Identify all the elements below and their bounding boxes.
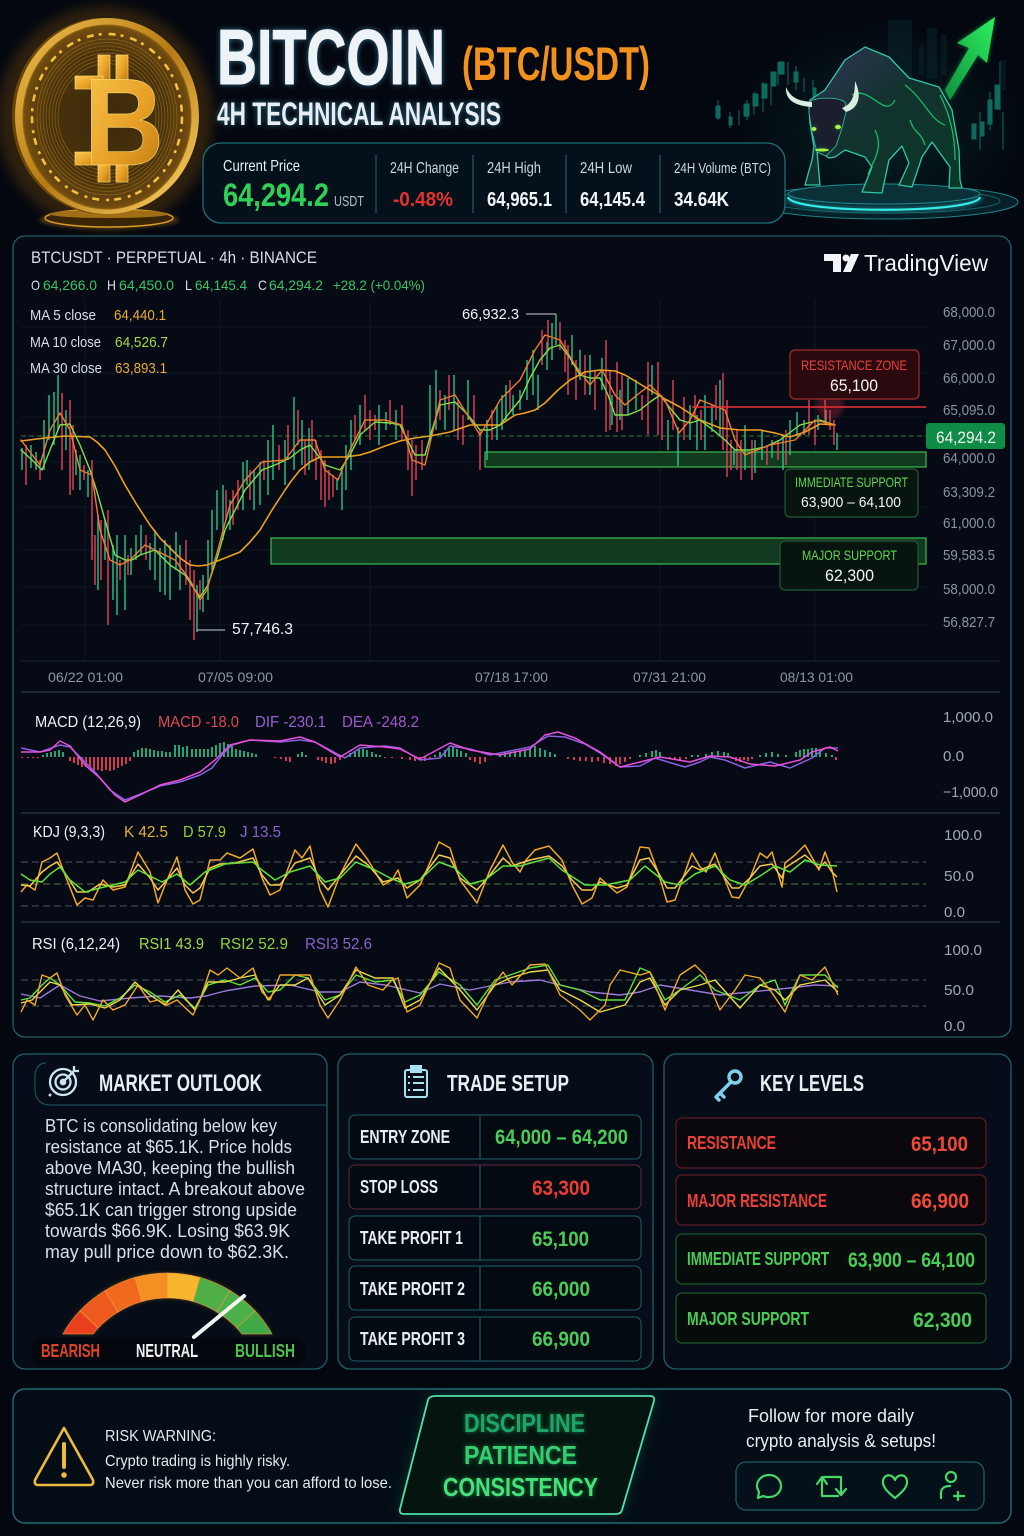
price axis: 61,000.0 (943, 515, 995, 532)
panel: chart (13, 236, 1011, 1037)
row: stop loss (349, 1165, 641, 1209)
price axis: 66,000.0 (943, 370, 995, 387)
24h volume (674, 160, 771, 211)
24h low: 24H Low (580, 160, 632, 177)
outlook heading: MARKET OUTLOOK (99, 1070, 262, 1097)
price axis (943, 304, 995, 631)
row: take profit 2: 66,000 (532, 1278, 590, 1301)
risk warning text: Crypto trading is highly risky. (105, 1453, 290, 1470)
follow text: crypto analysis & setups! (746, 1431, 936, 1451)
moving average legend: MA 10 close (30, 334, 101, 351)
level: immediate support: 63,900 – 64,100 (848, 1249, 975, 1272)
motto card (400, 1396, 654, 1514)
motto card: CONSISTENCY (443, 1472, 598, 1502)
MACD axis: −1,000.0 (943, 784, 998, 801)
time axis: 07/18 17:00 (475, 669, 548, 685)
chart header: 64,294.2 (269, 277, 323, 293)
price axis: 67,000.0 (943, 337, 995, 354)
MACD legend: MACD -18.0 (158, 714, 239, 731)
row: take profit 3: TAKE PROFIT 3 (360, 1329, 465, 1349)
level: major support: 62,300 (913, 1309, 972, 1332)
KDJ legend: KDJ (9,3,3) (33, 824, 105, 841)
row: take profit 2: TAKE PROFIT 2 (360, 1279, 465, 1299)
RSI axis: 0.0 (944, 1018, 965, 1035)
current price: USDT (334, 193, 364, 210)
chart header: L (185, 277, 192, 293)
level: resistance (676, 1118, 986, 1168)
KDJ axis: 0.0 (944, 904, 965, 921)
level: major support: MAJOR SUPPORT (687, 1309, 809, 1329)
title: BITCOIN (217, 13, 445, 101)
MA 30 line (21, 370, 835, 566)
KDJ legend (33, 824, 281, 841)
outlook body text (45, 1116, 305, 1262)
follow text (746, 1406, 936, 1451)
bull body (805, 47, 962, 193)
risk warning text (105, 1428, 392, 1492)
time axis: 07/31 21:00 (633, 669, 706, 685)
callout: major support: 62,300 (825, 566, 874, 585)
moving average legend: 63,893.1 (115, 360, 167, 377)
24h volume: 34.64K (674, 189, 729, 211)
RSI legend: RSI (6,12,24) (32, 936, 120, 953)
MACD axis (943, 709, 998, 801)
row: take profit 1: 65,100 (532, 1228, 589, 1251)
MACD axis: 0.0 (943, 748, 964, 765)
social icons (736, 1462, 984, 1510)
platform (752, 184, 1018, 219)
row: stop loss: STOP LOSS (360, 1177, 438, 1197)
row: take profit 1: TAKE PROFIT 1 (360, 1228, 463, 1248)
KDJ axis (944, 827, 982, 921)
MA 5 line (21, 335, 835, 600)
callout: resistance zone: RESISTANCE ZONE (801, 357, 907, 373)
risk warning text: RISK WARNING: (105, 1428, 216, 1445)
peak and trough labels (197, 306, 556, 638)
panel: footer (13, 1389, 1011, 1523)
follow text: Follow for more daily (748, 1406, 914, 1426)
outlook body text: may pull price down to $62.3K. (45, 1242, 289, 1262)
panel: key levels (664, 1054, 1011, 1369)
price axis: 63,309.2 (943, 484, 995, 501)
icon: warning triangle (35, 1428, 93, 1485)
RSI lines (21, 963, 838, 1020)
level: major resistance (676, 1175, 986, 1225)
title (217, 13, 650, 132)
24h change: -0.48% (393, 189, 453, 211)
motto card: DISCIPLINE (464, 1408, 585, 1438)
24h high: 24H High (487, 160, 541, 177)
price axis: 56,827.7 (943, 614, 995, 631)
green arrow (945, 17, 995, 100)
callout: major support (780, 541, 918, 590)
background market candles (716, 62, 1003, 150)
coin base (39, 209, 179, 228)
KDJ indicator (21, 824, 982, 921)
sentiment gauge: BULLISH (235, 1341, 295, 1361)
candlesticks (22, 314, 837, 640)
MACD legend: DEA -248.2 (342, 714, 419, 731)
peak and trough labels: 66,932.3 (462, 306, 519, 323)
price axis: 68,000.0 (943, 304, 995, 321)
callout: resistance zone: 65,100 (830, 376, 878, 395)
KDJ legend: K 42.5 (124, 824, 168, 841)
chart header: 64,145.4 (195, 277, 247, 293)
price axis: 64,000.0 (943, 450, 995, 467)
MACD signal lines (21, 732, 838, 802)
outlook body text: BTC is consolidating below key (45, 1116, 277, 1136)
MACD legend: MACD (12,26,9) (35, 714, 141, 731)
level: major resistance: 66,900 (911, 1190, 969, 1213)
row: entry zone: 64,000 – 64,200 (495, 1126, 628, 1149)
support zones (271, 452, 926, 564)
row: take profit 3: 66,900 (532, 1328, 590, 1351)
setup heading: TRADE SETUP (447, 1070, 569, 1096)
bull horns (786, 81, 859, 112)
level: resistance: 65,100 (911, 1133, 968, 1156)
price axis: 65,095.0 (943, 402, 995, 419)
title: (BTC/USDT) (462, 37, 650, 90)
RSI legend: RSI3 52.6 (305, 936, 372, 953)
time axis (48, 669, 853, 685)
current price tag: 64,294.2 (936, 428, 996, 447)
icon: repost (817, 1477, 846, 1496)
RSI legend: RSI2 52.9 (220, 936, 288, 953)
level: major support (676, 1293, 986, 1343)
current price: 64,294.2 (223, 177, 329, 213)
outlook body text: above MA30, keeping the bullish (45, 1158, 295, 1178)
time axis: 08/13 01:00 (780, 669, 853, 685)
level: immediate support: IMMEDIATE SUPPORT (687, 1249, 829, 1269)
MACD legend: DIF -230.1 (255, 714, 326, 731)
chart header: 64,266.0 (43, 277, 97, 293)
KDJ axis: 50.0 (944, 868, 974, 885)
sentiment gauge: BEARISH (41, 1341, 100, 1361)
current price (223, 158, 364, 213)
outlook body text: towards $66.9K. Losing $63.9K (45, 1221, 290, 1241)
KDJ axis: 100.0 (944, 827, 982, 844)
chart header: BTCUSDT · PERPETUAL · 4h · BINANCE (31, 248, 317, 267)
MACD axis: 1,000.0 (943, 709, 993, 726)
moving average legend: 64,526.7 (115, 334, 168, 351)
sentiment gauge: NEUTRAL (136, 1341, 198, 1361)
callout: immediate support: IMMEDIATE SUPPORT (795, 474, 908, 490)
sentiment gauge (32, 1273, 305, 1367)
motto card: PATIENCE (464, 1440, 577, 1470)
gauge needle (194, 1296, 244, 1337)
panel: trade setup (338, 1054, 653, 1369)
RSI legend: RSI1 43.9 (139, 936, 204, 953)
chart header (31, 248, 425, 293)
current price: Current Price (223, 158, 300, 175)
24h low: 64,145.4 (580, 189, 646, 211)
price axis: 58,000.0 (943, 581, 995, 598)
current price tag (926, 423, 1005, 449)
KDJ legend: J 13.5 (240, 824, 281, 841)
row: take profit 1 (349, 1216, 641, 1260)
RSI legend (32, 936, 372, 953)
KDJ legend: D 57.9 (183, 824, 226, 841)
icon: key (716, 1071, 741, 1100)
MACD indicator (21, 709, 998, 802)
callout: immediate support (785, 469, 918, 517)
chart header: H (107, 277, 116, 293)
24h low (580, 160, 646, 211)
chart header: C (258, 277, 267, 293)
24h high (487, 160, 552, 211)
callout: major support: MAJOR SUPPORT (802, 547, 897, 563)
time axis: 07/05 09:00 (198, 669, 273, 685)
outlook body text: structure intact. A breakout above (45, 1179, 305, 1199)
chart header: O (31, 277, 40, 293)
RSI indicator (21, 936, 982, 1035)
title: 4H TECHNICAL ANALYSIS (217, 96, 501, 132)
RSI axis: 50.0 (944, 982, 974, 999)
icon: follow user (941, 1472, 964, 1500)
stats bar (203, 143, 785, 223)
moving average legend: MA 5 close (30, 307, 96, 324)
coin: bitcoin (0, 6, 213, 230)
icon: target (49, 1066, 79, 1096)
MACD histogram (22, 742, 836, 771)
24h change: 24H Change (390, 160, 459, 177)
tradingview logo: TradingView (864, 250, 988, 276)
bull eyes (812, 125, 841, 152)
bull illustration (716, 17, 1018, 219)
moving average legend: MA 30 close (30, 360, 102, 377)
levels heading: KEY LEVELS (760, 1070, 864, 1096)
level: major resistance: MAJOR RESISTANCE (687, 1191, 827, 1211)
24h change (390, 160, 459, 211)
row: entry zone: ENTRY ZONE (360, 1127, 450, 1147)
time axis: 06/22 01:00 (48, 669, 123, 685)
panel: market outlook (13, 1054, 327, 1369)
row: stop loss: 63,300 (532, 1177, 590, 1200)
24h high: 64,965.1 (487, 189, 552, 211)
skyline (888, 20, 1006, 90)
outlook body text: $65.1K can trigger strong upside (45, 1200, 297, 1220)
RSI axis: 100.0 (944, 942, 982, 959)
24h volume: 24H Volume (BTC) (674, 160, 771, 177)
icon: comment (757, 1475, 781, 1498)
callout: immediate support: 63,900 – 64,100 (801, 494, 901, 511)
row: entry zone (349, 1115, 641, 1159)
price axis: 59,583.5 (943, 547, 995, 564)
chart header: +28.2 (+0.04%) (333, 277, 425, 293)
chart header: 64,450.0 (119, 277, 174, 293)
row: take profit 3 (349, 1317, 641, 1361)
peak and trough labels: 57,746.3 (232, 621, 293, 638)
level: immediate support (676, 1234, 986, 1284)
icon: clipboard (405, 1066, 427, 1097)
MACD legend (35, 714, 419, 731)
RSI axis (944, 942, 982, 1035)
moving average lines (21, 335, 835, 600)
KDJ lines (21, 842, 837, 907)
bitcoin B symbol: B (84, 54, 164, 192)
risk warning text: Never risk more than you can afford to lose. (105, 1475, 392, 1492)
bull shading (852, 85, 955, 175)
moving average legend (30, 307, 168, 377)
icon: heart (883, 1475, 907, 1498)
callout: resistance zone (790, 350, 919, 399)
outlook body text: resistance at $65.1K. Price holds (45, 1137, 292, 1157)
row: take profit 2 (349, 1266, 641, 1310)
moving average legend: 64,440.1 (114, 307, 166, 324)
bull head (809, 98, 846, 156)
level: resistance: RESISTANCE (687, 1133, 776, 1153)
MA 10 line (21, 345, 835, 597)
resistance line (692, 406, 926, 408)
